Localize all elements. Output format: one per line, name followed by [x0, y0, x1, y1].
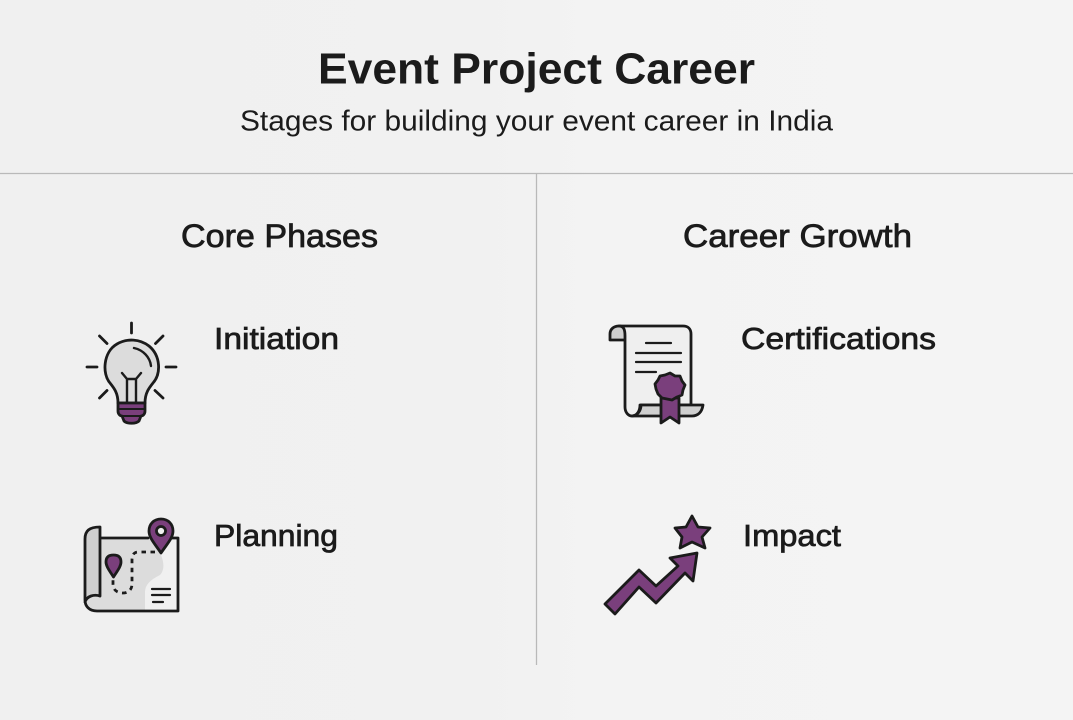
title: Event Project Career [318, 44, 755, 94]
panel: career growth [605, 218, 936, 614]
label: initiation: Initiation [214, 321, 339, 356]
label: impact: Impact [743, 518, 841, 553]
heading: career growth: Career Growth [683, 218, 912, 254]
label: certifications: Certifications [741, 321, 936, 356]
icon: rising arrow and star [605, 516, 710, 614]
heading: core phases: Core Phases [181, 218, 378, 254]
icon: route map [85, 519, 178, 611]
icon: light bulb [87, 323, 176, 423]
subtitle: Stages for building your event career in India [240, 106, 834, 138]
panel: core phases [85, 218, 378, 611]
icon: certificate [610, 326, 703, 423]
label: planning: Planning [214, 518, 338, 553]
